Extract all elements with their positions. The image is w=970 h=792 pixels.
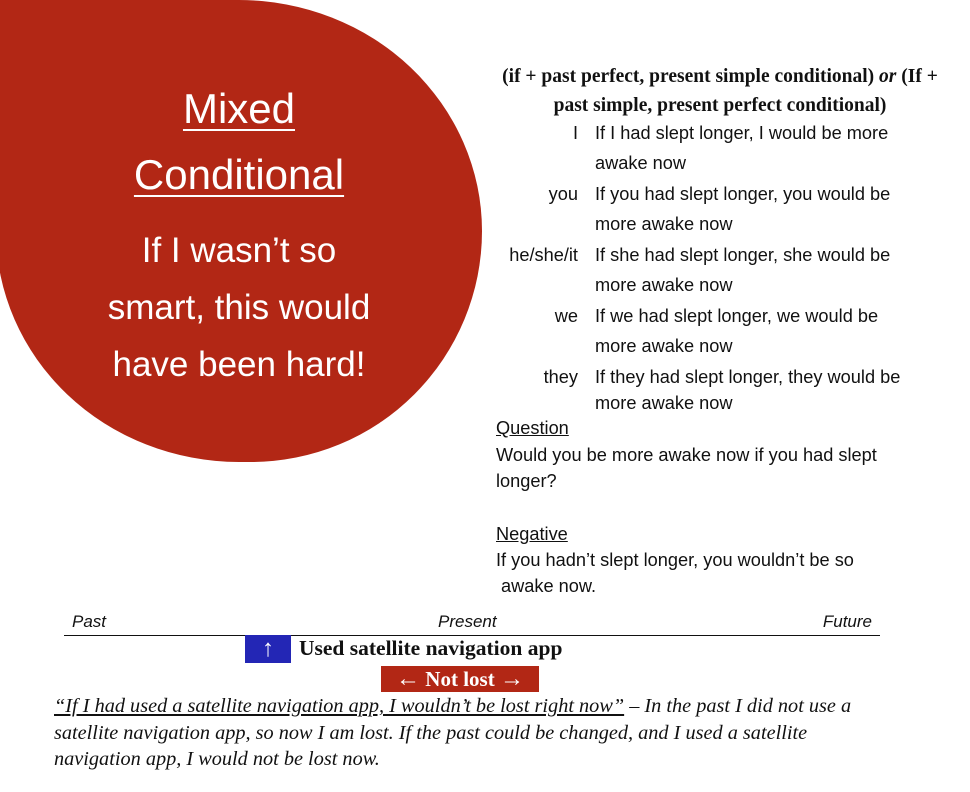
conjugation table: If they had slept longer, they would be [595,367,900,387]
label: not lost: ← Not lost → [396,666,524,692]
explanation text: “If I had used a satellite navigation app, I wouldn’t be lost right now” – In the past I did not use a [54,695,851,717]
title: Conditional [134,151,344,198]
negative block: Negative [496,524,568,544]
timeline: Present [438,612,497,631]
title: Mixed [183,85,295,132]
formula heading: (if + past perfect, present simple conditional) or (If + [502,66,938,87]
conjugation table: If we had slept longer, we would be [595,306,878,326]
conjugation table: If I had slept longer, I would be more [595,123,888,143]
conjugation table: awake now [595,153,686,173]
timeline: Future [823,612,872,631]
formula heading [502,66,938,116]
subtitle text: If I wasn’t so [142,231,336,270]
subtitle text: have been hard! [112,345,365,384]
conjugation table: we [555,306,578,326]
icon: up arrow box [245,635,291,663]
title [134,85,344,198]
red circle panel [0,0,482,462]
formula heading: past simple, present perfect conditional) [554,95,886,116]
negative block: If you hadn’t slept longer, you wouldn’t be so [496,550,854,570]
conjugation table: more awake now [595,336,732,356]
conjugation table: I [573,123,578,143]
negative block: awake now. [501,576,596,596]
question block [496,418,877,491]
question block: Question [496,418,569,438]
timeline [64,612,880,636]
conjugation table: they [544,367,578,387]
subtitle text: smart, this would [108,288,370,327]
explanation text: satellite navigation app, so now I am lost. If the past could be changed, and I used a satellite [54,722,807,744]
timeline: Past [72,612,106,631]
icon: up arrow box: ↑ [262,635,274,662]
conjugation table: If she had slept longer, she would be [595,245,890,265]
conjugation table: you [549,184,578,204]
conjugation table [509,123,900,413]
conjugation table: he/she/it [509,245,578,265]
explanation text [54,695,851,770]
label: used satellite navigation app: Used satellite navigation app [299,636,562,660]
conjugation table: more awake now [595,214,732,234]
subtitle text [108,231,370,384]
question block: Would you be more awake now if you had slept [496,444,877,464]
question block: longer? [496,471,557,491]
explanation text: navigation app, I would not be lost now. [54,748,380,770]
conjugation table: more awake now [595,275,732,295]
conjugation table: more awake now [595,393,732,413]
negative block [496,524,854,596]
conjugation table: If you had slept longer, you would be [595,184,890,204]
